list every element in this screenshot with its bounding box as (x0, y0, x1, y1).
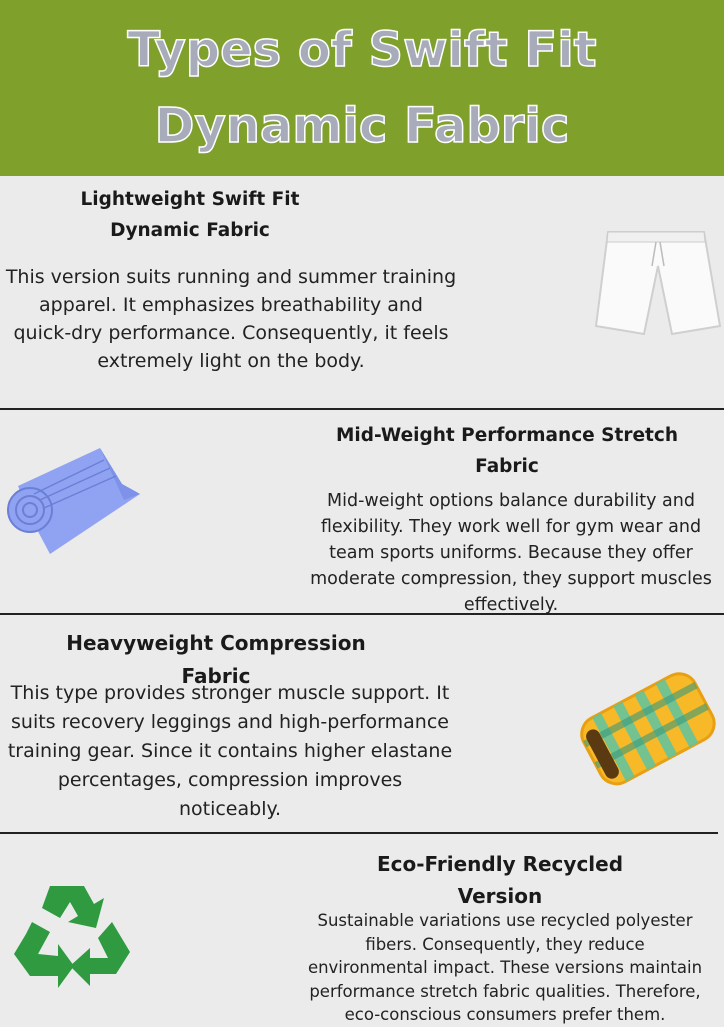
heading: lightweight: Dynamic Fabric (110, 220, 270, 241)
text: mid-weight: team sports uniforms. Because they offer (329, 543, 693, 563)
panel: lightweight (6, 189, 721, 372)
text: heavyweight: suits recovery leggings and high-performance (11, 711, 449, 733)
text: lightweight: quick-dry performance. Consequently, it feels (13, 322, 449, 344)
text: eco-friendly: environmental impact. These versions maintain (308, 958, 702, 977)
text: mid-weight: moderate compression, they support muscles (310, 569, 712, 589)
icon: blue rolled fabric (7, 448, 140, 554)
heading: eco-friendly: Version (458, 884, 542, 908)
icon: plaid rolled fabric (580, 672, 716, 786)
text: heavyweight: This type provides stronger muscle support. It (11, 682, 449, 704)
text: heavyweight: noticeably. (179, 798, 281, 820)
heading: heavyweight: Heavyweight Compression (66, 631, 366, 655)
header banner (0, 0, 724, 176)
text: heavyweight (8, 682, 452, 820)
panel: mid-weight (7, 425, 712, 615)
heading: lightweight (80, 189, 300, 241)
heading: eco-friendly: Eco-Friendly Recycled (377, 852, 623, 876)
icon: recycle symbol (14, 886, 130, 988)
panel: eco-friendly (14, 852, 702, 1024)
text: mid-weight: flexibility. They work well for gym wear and (321, 517, 701, 537)
heading: eco-friendly (377, 852, 623, 908)
heading: mid-weight (336, 425, 678, 477)
text: eco-friendly: performance stretch fabric qualities. Therefore, (309, 982, 701, 1001)
text: mid-weight (310, 491, 712, 615)
heading: heavyweight: Fabric (182, 664, 250, 688)
panel: heavyweight (8, 631, 716, 820)
text: lightweight: This version suits running and summer training (6, 266, 456, 288)
text: mid-weight: Mid-weight options balance durability and (327, 491, 695, 511)
heading: heavyweight (66, 631, 366, 688)
text: eco-friendly: fibers. Consequently, they reduce (365, 935, 645, 954)
heading: mid-weight: Fabric (475, 456, 539, 477)
text: heavyweight: percentages, compression improves (58, 769, 402, 791)
text: eco-friendly: Sustainable variations use recycled polyester (318, 911, 692, 930)
title: Types of Swift Fit (127, 22, 597, 78)
text: lightweight (6, 266, 456, 372)
text: mid-weight: effectively. (464, 595, 558, 615)
title (126, 22, 597, 154)
heading: mid-weight: Mid-Weight Performance Stretch (336, 425, 678, 446)
text: eco-friendly: eco-conscious consumers prefer them. (345, 1005, 665, 1024)
text: eco-friendly (308, 911, 702, 1024)
text: lightweight: apparel. It emphasizes breathability and (39, 294, 423, 316)
heading: lightweight: Lightweight Swift Fit (80, 189, 299, 210)
text: heavyweight: training gear. Since it contains higher elastane (8, 740, 452, 762)
text: lightweight: extremely light on the body. (97, 350, 365, 372)
title: Dynamic Fabric (155, 98, 569, 154)
icon: white shorts (595, 231, 721, 335)
